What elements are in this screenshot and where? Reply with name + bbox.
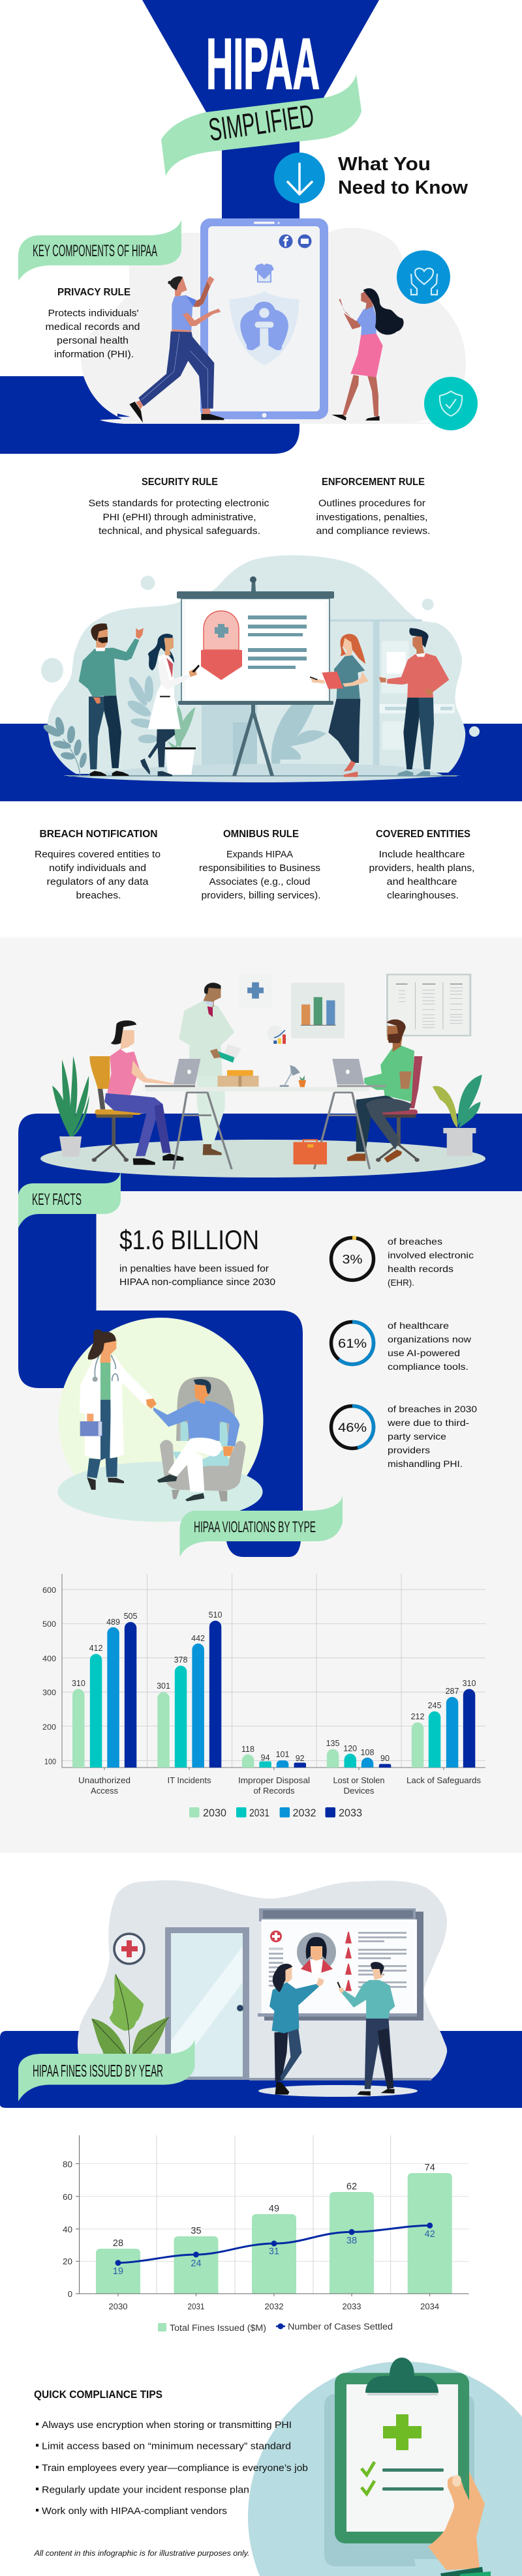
legend [158,2322,393,2333]
data labels: 378 [174,1655,187,1665]
data labels: 135 [326,1739,339,1748]
bar value labels: 35 [191,2226,202,2236]
text: 3% stat: of breaches [388,1236,442,1247]
person: man pointing [337,1962,395,2095]
icon: green cross [383,2414,422,2450]
text: privacy rule: information (PHI). [54,349,134,360]
table with laptops [145,1059,386,1169]
y axis labels: 20 [63,2257,72,2266]
text: covered entities: clearinghouses. [387,890,459,901]
illustration: doctor and patient [57,1318,264,1522]
legend: Total Fines Issued ($M) [170,2323,266,2333]
illustration: reviewing patient board [0,1880,522,2108]
y axis labels: 60 [63,2192,72,2202]
text: omnibus rule: providers, billing services). [201,890,321,901]
icon: right plant [433,1074,482,1156]
floor lens [100,419,457,424]
patient in armchair [146,1377,246,1502]
text: breach notification [35,829,161,901]
tips list: Work only with HIPAA-compliant vendors [42,2506,227,2517]
donut: 46%: 46% [338,1421,367,1435]
donut: 3%: 3% [342,1253,363,1267]
data labels: 90 [380,1754,390,1763]
bar value labels: 74 [425,2163,435,2173]
icon: medical cross [114,1934,144,1964]
category labels: Access [91,1786,118,1796]
ribbon: simplified [161,74,361,176]
category labels: IT Incidents [167,1776,211,1785]
illustration: woman waving [331,288,404,421]
legend: 2031 [249,1807,269,1819]
ribbon: simplified: SIMPLIFIED [206,98,316,148]
data labels: 287 [446,1687,459,1696]
text: security rule: technical, and physical safeguards. [99,526,260,537]
y axis labels [42,1586,56,1766]
hand [428,2472,491,2576]
legend: Number of Cases Settled [288,2322,393,2332]
text: enforcement rule [316,477,431,537]
data labels: 505 [124,1612,137,1621]
person: woman with clipboard [310,634,369,777]
background blob [81,228,466,424]
x axis labels: 2030 [108,2302,128,2311]
icon: toolbox [294,1140,327,1164]
text: enforcement rule: and compliance reviews. [316,526,431,537]
text: 61% stat: compliance tools. [388,1361,468,1372]
text: security rule: Sets standards for protecting electronic [89,498,269,509]
text: quick compliance tips [34,2389,308,2517]
ribbon: fines by year: HIPAA FINES ISSUED BY YEAR [33,2061,163,2080]
text: breach notification: breaches. [76,890,121,901]
text: covered entities: COVERED ENTITIES [376,829,470,840]
tips list [36,2420,308,2517]
text: privacy rule: personal health [57,335,129,346]
data labels: 120 [343,1744,357,1753]
line: cases settled [115,2223,433,2266]
grid lines [80,2135,468,2294]
x axis labels: 2031 [188,2302,205,2311]
y axis labels: 80 [63,2159,72,2169]
text: 3% stat: (EHR). [388,1277,414,1288]
y axis labels: 200 [42,1723,56,1732]
text: 61% stat: use AI-powered [388,1348,460,1358]
illustration: phone [200,218,328,419]
bars: lost or stolen [327,1749,391,1768]
text: 46% stat [387,1404,477,1469]
text: omnibus rule: OMNIBUS RULE [223,829,299,840]
text: breach notification: notify individuals and [49,863,146,874]
line value labels: 31 [269,2247,279,2257]
y axis labels: 500 [42,1620,56,1629]
text: 61% stat: organizations now [388,1334,472,1344]
ribbon: violations by type: HIPAA VIOLATIONS BY TYPE [194,1518,316,1536]
floor [249,2078,431,2097]
bar value labels: 28 [113,2238,123,2249]
text: privacy rule: Protects individuals' [48,308,139,319]
legend: 2032 [292,1807,316,1819]
text: 46% stat: party service [388,1431,446,1442]
text: enforcement rule: ENFORCEMENT RULE [322,477,425,488]
y axis labels: 400 [42,1654,56,1663]
line value labels [113,2229,435,2277]
data labels: 212 [411,1712,424,1721]
text: omnibus rule: Associates (e.g., cloud [209,876,311,887]
ribbon: key facts [18,1172,121,1228]
text: 3% stat: involved electronic [388,1250,474,1260]
text: omnibus rule [199,829,321,901]
grid lines [62,1574,485,1768]
text: breach notification: BREACH NOTIFICATION [39,829,158,840]
data labels [72,1610,476,1763]
person: man in green sweater [79,623,144,776]
donut: 3% [331,1237,373,1281]
tips list: Always use encryption when storing or transmitting PHI [42,2420,292,2431]
donut: 46% [331,1406,373,1449]
category labels: Lack of Safeguards [407,1776,481,1785]
data labels: 310 [463,1679,476,1688]
footnote: All content in this infographic is for illustrative purposes only. [33,2549,249,2558]
text: breach notification: regulators of any data [47,876,149,887]
wall frames [238,973,470,1044]
axes [62,1574,485,1770]
person: seated woman [89,1020,183,1165]
y axis labels: 0 [68,2289,72,2299]
data labels: 310 [72,1679,85,1688]
blue backdrop [18,1114,522,1557]
line value labels: 38 [346,2236,357,2246]
text: 46% stat: were due to third- [387,1417,469,1428]
bars: it incidents [157,1621,221,1768]
text: omnibus rule: Expands HIPAA [226,849,293,860]
text: 3% stat [388,1236,474,1288]
icon: plant [42,716,88,776]
backdrop building [325,619,455,766]
text: covered entities: and healthcare [386,876,457,887]
text: covered entities: Include healthcare [378,849,465,860]
data labels: 412 [89,1644,102,1653]
icon: shield check [424,377,478,430]
panel: header [0,0,478,454]
bar value labels [113,2163,435,2249]
backdrop door and leaves [125,675,326,775]
data labels: 301 [157,1681,170,1691]
person: seated man [347,1019,422,1162]
category labels: Devices [343,1786,375,1796]
person: doctor [140,634,200,777]
bars: improper disposal [242,1754,306,1768]
category labels: Improper Disposal [238,1776,310,1785]
text: enforcement rule: investigations, penalties, [316,512,428,523]
data labels: 510 [209,1610,222,1620]
axes [76,2135,468,2296]
text: security rule: SECURITY RULE [142,477,218,488]
board [177,576,334,776]
person: woman pointing [269,1964,324,2095]
bars: unauthorized access [72,1622,136,1768]
line value labels: 19 [113,2266,123,2277]
bar value labels: 62 [346,2182,357,2192]
y axis labels: 100 [44,1757,56,1766]
text: breach notification: Requires covered entities to [35,849,161,860]
donut: 61%: 61% [338,1337,367,1351]
stat: penalties: in penalties have been issued for [119,1264,269,1274]
text: security rule: PHI (ePHI) through administrative, [103,512,256,523]
data labels: 489 [106,1618,120,1627]
y axis labels: 600 [42,1586,56,1595]
text: omnibus rule: responsibilities to Business [199,863,320,874]
data labels: 92 [296,1754,305,1763]
category labels [78,1776,481,1796]
ribbon: fines by year [18,2039,194,2101]
ribbon: key components: KEY COMPONENTS OF HIPAA [33,242,157,260]
ribbon: violations by type [180,1496,343,1557]
data labels: 101 [276,1750,289,1759]
text: 3% stat: health records [388,1264,453,1274]
subtitle [338,154,468,198]
y axis labels: 300 [42,1688,56,1697]
text: privacy rule: PRIVACY RULE [57,287,130,298]
illustration: clipboard [248,2358,522,2576]
ellipse: floor [63,763,461,782]
tips list: Regularly update your incident response plan [42,2484,249,2496]
stat: penalties: HIPAA non-compliance since 2030 [119,1277,275,1288]
data labels: 94 [261,1753,270,1762]
illustration: team at presentation board [0,555,522,801]
text: covered entities: providers, health plans, [369,863,475,874]
subtitle: What You [338,154,431,175]
plant [91,1974,170,2056]
person: man in red sweater [379,628,449,776]
category labels: of Records [253,1786,295,1796]
text: covered entities [369,829,475,901]
doctor [80,1329,155,1490]
patient board [258,1908,423,2021]
bar value labels: 49 [269,2204,279,2214]
y axis labels [63,2159,72,2299]
subtitle: Need to Know [338,177,468,198]
tips list: Train employees every year—compliance is everyone’s job [42,2463,308,2474]
text: 46% stat: providers [388,1445,430,1455]
title: HIPAA [206,24,320,104]
icon: heart hands [397,250,450,304]
legend: 2033 [339,1807,362,1819]
line value labels: 24 [191,2258,202,2269]
category labels: Lost or Stolen [333,1776,385,1785]
data labels: 442 [191,1634,205,1643]
text: privacy rule [46,287,140,360]
bars: lack of safeguards [412,1689,475,1768]
legend: 2030 [203,1807,226,1819]
data labels: 118 [241,1745,254,1754]
bars: total fines [96,2173,452,2294]
x axis labels [108,2302,439,2311]
text: enforcement rule: Outlines procedures for [318,498,425,509]
checklist [361,2462,444,2494]
chart: violations by type [42,1574,485,1819]
text: quick compliance tips: QUICK COMPLIANCE TIPS [34,2389,162,2401]
line value labels: 42 [425,2229,435,2240]
text: 46% stat: mishandling PHI. [388,1458,463,1469]
y axis labels: 40 [63,2225,72,2234]
tips list: Limit access based on “minimum necessary” standard [42,2441,291,2451]
panel: key facts [0,938,522,1853]
ribbon: key components [18,220,181,281]
text: security rule [89,477,269,537]
icon: left plant [52,1056,89,1157]
door [165,1927,249,2080]
stat: penalties: $1.6 BILLION [119,1224,259,1255]
text: 61% stat [388,1320,472,1372]
x axis labels: 2034 [420,2302,439,2311]
illustration: man pushing phone [117,276,224,422]
data labels: 245 [428,1701,441,1710]
donut: 61% [331,1322,373,1364]
blue funnel backdrop [0,0,379,454]
stat: penalties [119,1224,275,1288]
x axis labels: 2032 [265,2302,284,2311]
icon: down arrow [274,153,325,203]
text: 46% stat: of breaches in 2030 [388,1404,477,1414]
chart: fines by year [63,2135,468,2333]
ribbon: key facts: KEY FACTS [32,1191,82,1209]
illustration: office scene [40,973,485,1177]
category labels: Unauthorized [78,1776,130,1785]
legend [189,1807,362,1819]
text: privacy rule: medical records and [46,321,140,333]
person: standing doctor [179,983,241,1155]
text: 61% stat: of healthcare [388,1320,449,1331]
pot plant [165,705,196,775]
x axis labels: 2033 [342,2302,361,2311]
data labels: 108 [361,1748,374,1757]
